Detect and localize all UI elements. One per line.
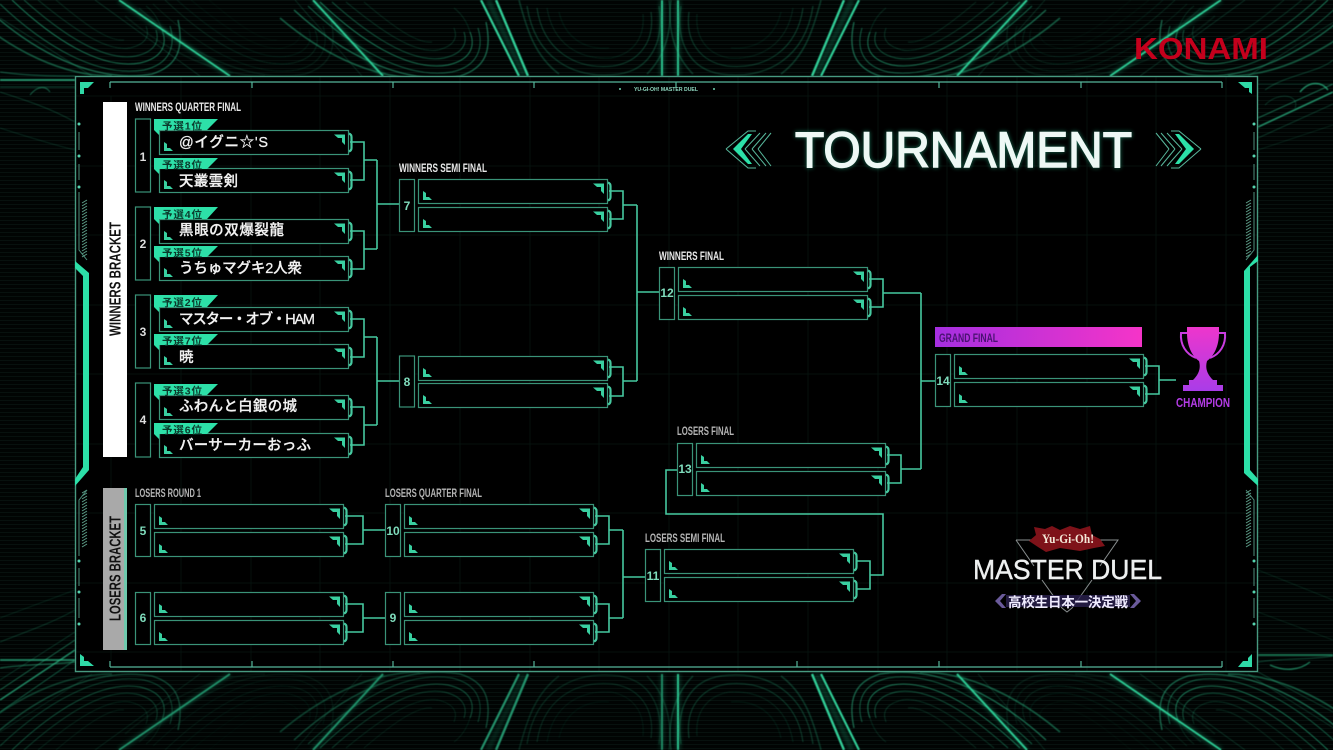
match 2: うちゅマグキ2人衆 [179,260,302,277]
panel: bracket frame: YU-GI-OH! MASTER DUEL [634,87,699,93]
match 4: 予選6位 [162,424,202,436]
match 5: 5 [140,524,147,538]
logo: Yu-Gi-Oh Master Duel [973,526,1162,612]
panel: winners bracket label: WINNERS BRACKET [108,222,124,336]
match 1: 予選8位 [162,158,202,172]
match 4: 4 [140,413,147,427]
heading: winners quarter final: WINNERS QUARTER FINAL [135,102,241,114]
logo: Yu-Gi-Oh Master Duel: 高校生日本一決定戦 [1008,594,1128,610]
panel: winners bracket label [103,102,127,457]
match 5 [136,504,346,556]
match 2: 2 [140,237,147,251]
match 4: バーサーカーおっふ [179,437,312,454]
match 4: ふわんと白銀の城 [179,398,298,415]
heading: grand final: GRAND FINAL [939,333,998,345]
match 2: 予選5位 [162,246,202,260]
title: Tournament: TOURNAMENT [795,122,1132,178]
match 3 [136,295,352,368]
panel: losers bracket label [103,488,127,650]
match 1: 天叢雲剣 [179,173,238,190]
match 9 [386,592,596,644]
heading: losers final: LOSERS FINAL [677,426,734,438]
label: champion: CHAMPION [1176,395,1230,410]
panel: losers bracket label: LOSERS BRACKET [108,516,124,621]
heading: winners final: WINNERS FINAL [659,251,724,263]
match 12 [660,268,870,320]
heading: losers semi final: LOSERS SEMI FINAL [645,533,725,545]
match 10: 10 [386,524,400,538]
match 1: 1 [140,150,147,164]
heading: winners semi final: WINNERS SEMI FINAL [399,163,487,175]
heading: losers round 1: LOSERS ROUND 1 [135,488,201,500]
icon: trophy [1181,327,1225,391]
logo: Konami: KONAMI [1134,31,1268,66]
match 14: 14 [936,374,950,388]
match 12: 12 [660,286,674,300]
match 3: マスター・オブ・HAM [179,310,315,328]
match 6 [136,592,346,644]
match 1 [136,119,352,192]
panel: bracket frame [75,76,1258,672]
heading: losers quarter final: LOSERS QUARTER FINAL [385,488,482,500]
match 3: 予選7位 [162,334,202,348]
logo: Yu-Gi-Oh Master Duel: Yu-Gi-Oh! [1042,531,1094,546]
match 2: 予選4位 [162,208,202,221]
match 8: 8 [404,375,411,389]
connectors [345,142,1176,632]
icon: left chevrons [726,131,771,168]
logo: Yu-Gi-Oh Master Duel: MASTER DUEL [973,554,1162,585]
match 7: 7 [404,199,411,213]
match 9: 9 [390,611,397,625]
match 11: 11 [647,569,660,583]
match 13 [678,444,888,496]
icon: right chevrons [1156,131,1201,168]
match 10 [386,504,596,556]
match 8 [400,356,610,408]
match 4: 予選3位 [162,384,202,398]
match 11 [646,550,856,602]
match 3: 暁 [179,349,194,366]
match 4 [136,383,352,458]
match 14 [936,354,1146,406]
title: Tournament: TOURNAMENT [795,122,1132,178]
match 13: 13 [678,462,692,476]
match 6: 6 [140,611,147,625]
match 7 [400,180,610,232]
match 1: 予選1位 [162,120,202,132]
match 1: @イグニ☆'S [179,134,268,151]
match 3: 3 [140,325,147,339]
match 3: 予選2位 [162,296,202,309]
match 2 [136,207,352,280]
match 2: 黒眼の双爆裂龍 [179,221,284,239]
heading: grand final [935,327,1142,347]
